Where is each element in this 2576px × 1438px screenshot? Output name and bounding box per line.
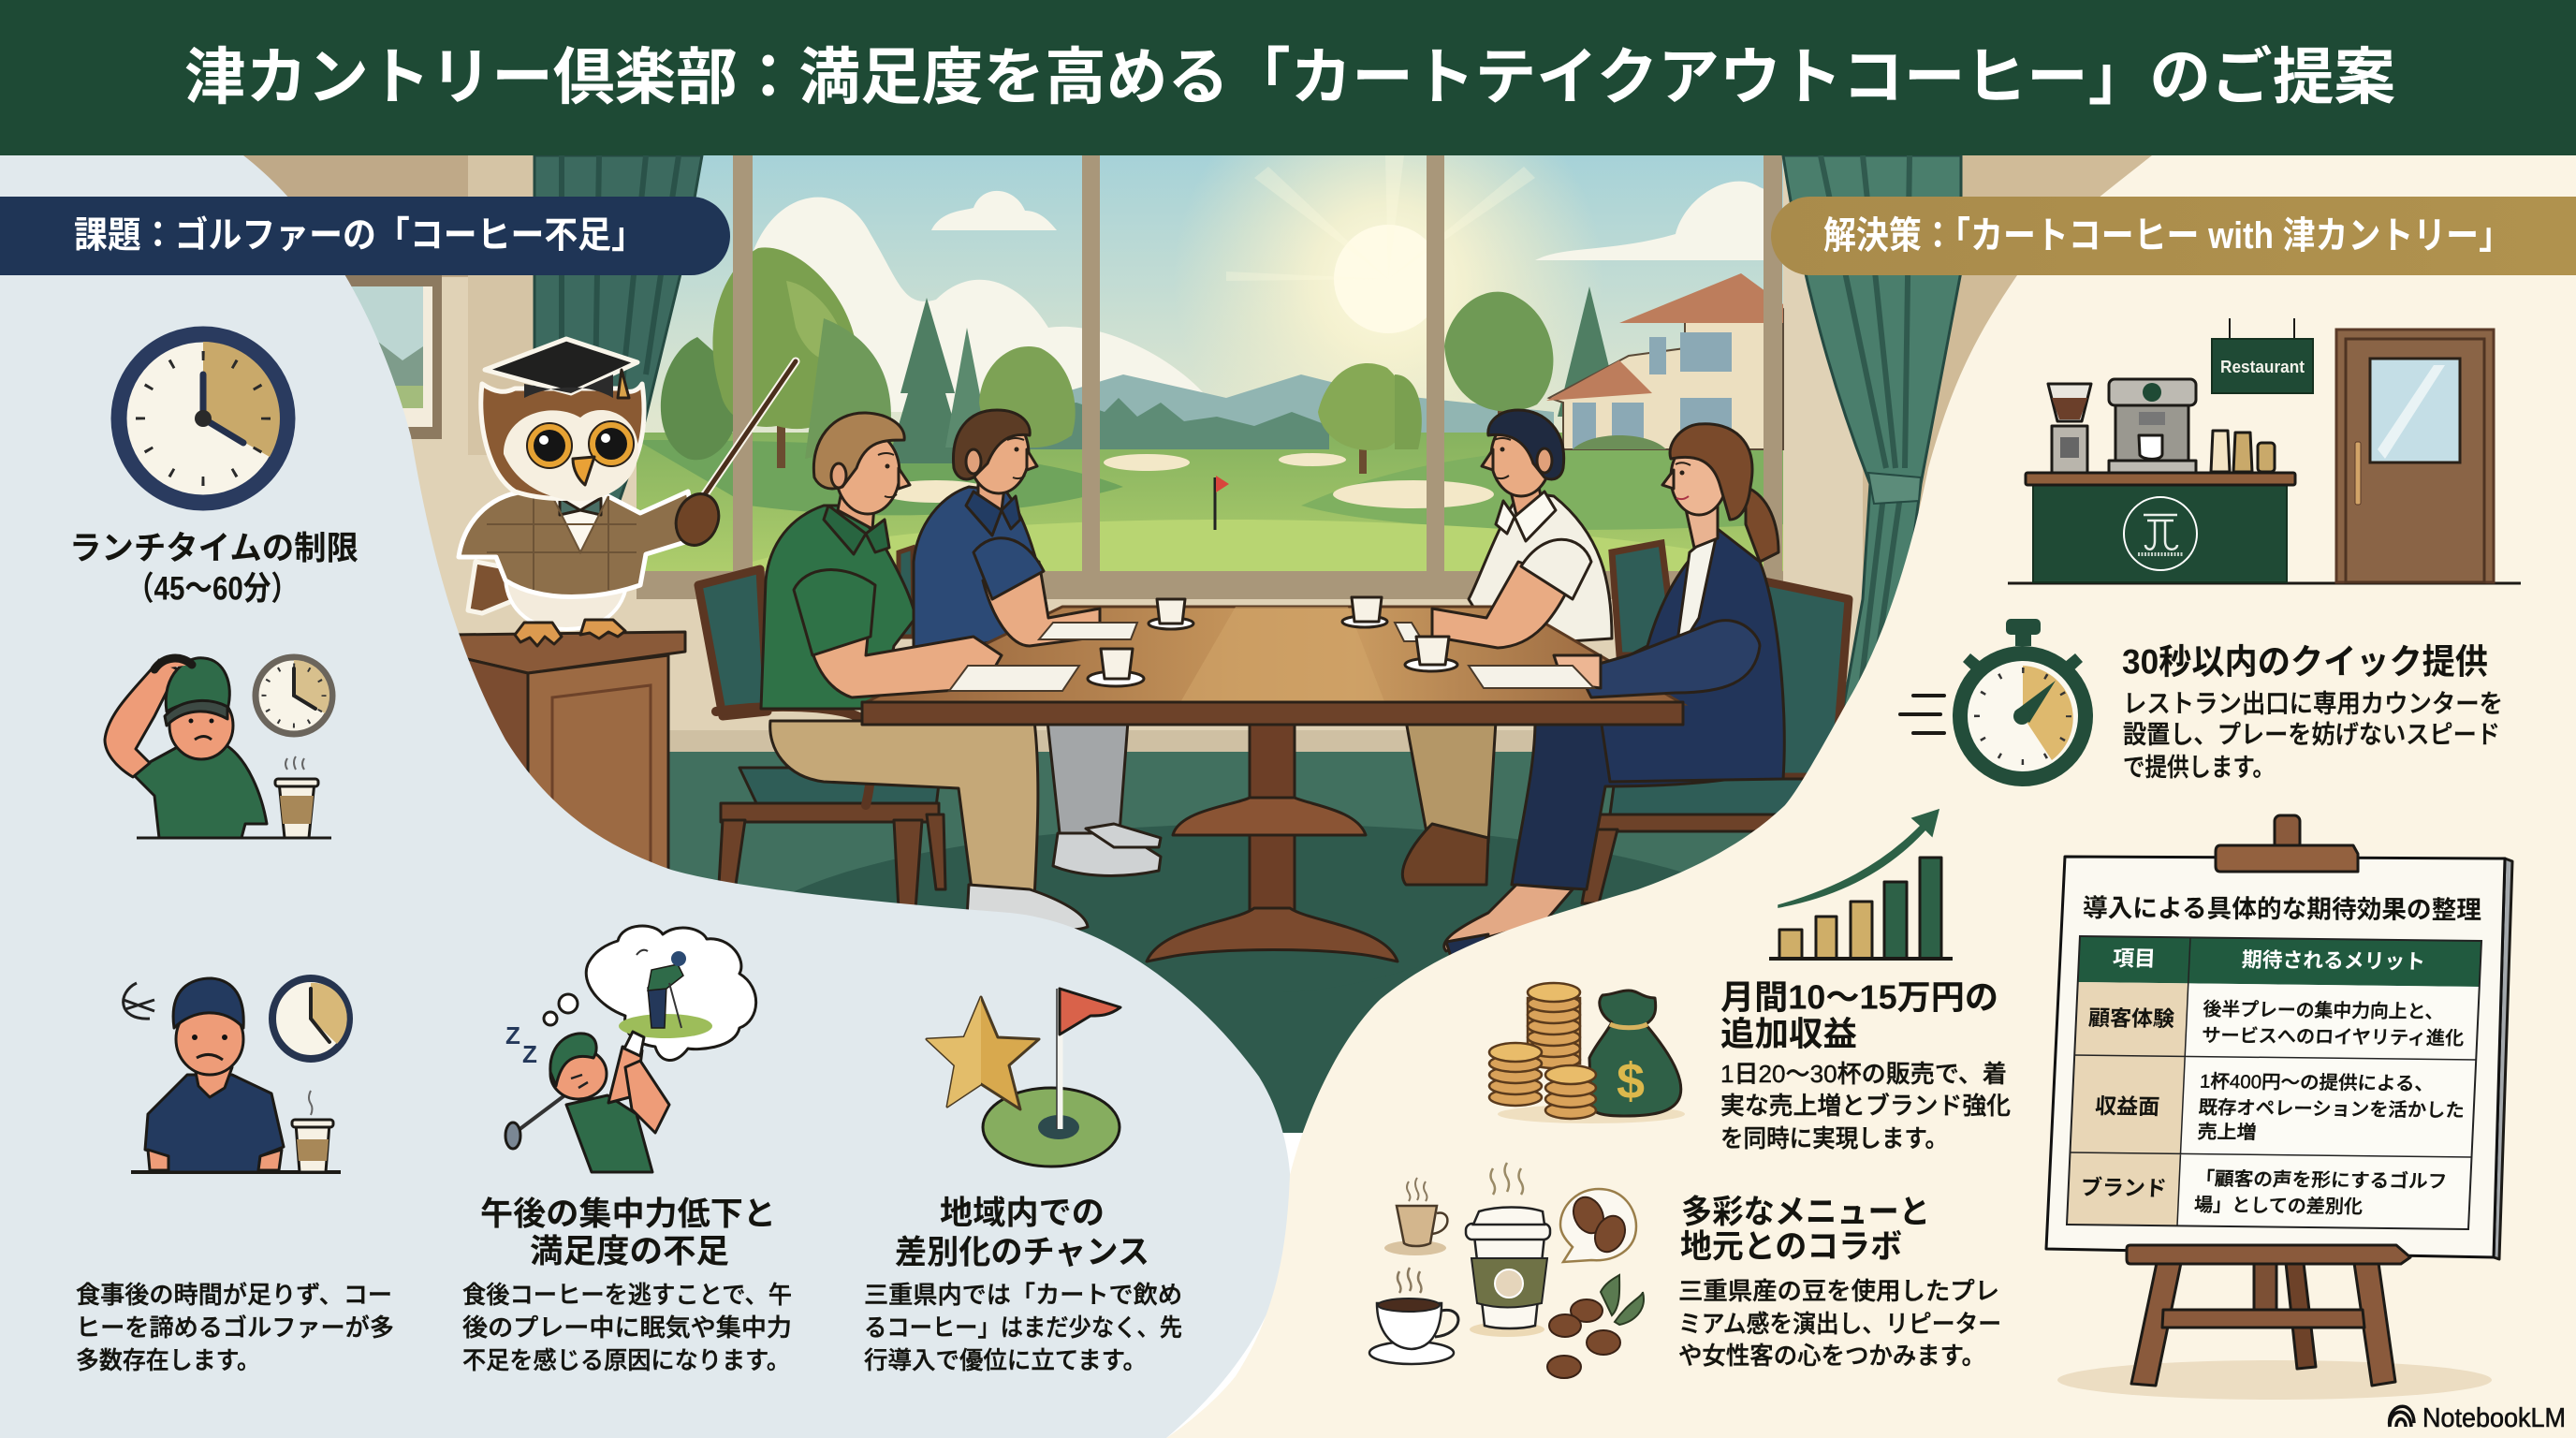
latte cup	[1384, 1178, 1447, 1255]
window view	[637, 64, 1783, 599]
text: additional revenue: を同時に実現します。	[1720, 1124, 1948, 1152]
arms and hands	[794, 538, 1760, 697]
flag on green	[1215, 476, 1229, 530]
text: additional revenue: 実な売上増とブランド強化	[1720, 1092, 2011, 1120]
effects table: 既存オペレーションを活かした	[2198, 1097, 2465, 1122]
banner: solution heading	[1771, 197, 2576, 275]
person: woman in navy suit	[1594, 424, 1784, 782]
restaurant sign: Restaurant	[2220, 358, 2305, 376]
effects table: ブランド	[2080, 1175, 2167, 1200]
panel: issue (blue background)	[0, 155, 1291, 1438]
icon: takeaway coffee 1	[275, 756, 318, 838]
effects table: 項目	[2112, 946, 2157, 971]
face	[504, 410, 638, 501]
table pedestal	[1147, 721, 1398, 961]
text column: afternoon focus: 不足を感じる原因になります。	[462, 1346, 790, 1374]
heading: lunch time limit	[69, 530, 359, 607]
text: quick service	[2122, 642, 2503, 782]
podium	[451, 632, 685, 899]
coin stack front	[1545, 1065, 1596, 1119]
golfer head	[550, 1049, 607, 1099]
coin stack tall	[1528, 983, 1580, 1068]
central scene: clubhouse meeting room	[0, 64, 2576, 1133]
text column: lunch time body: 多数存在します。	[76, 1346, 260, 1374]
chair: left front	[698, 569, 945, 910]
golfer arms	[608, 1047, 642, 1103]
effects table: 「顧客の声を形にするゴルフ	[2195, 1167, 2448, 1193]
loose beans and leaves	[1547, 1275, 1644, 1378]
coffee grinder	[2048, 384, 2091, 473]
right curtain	[1783, 155, 1961, 740]
heading: lunch time limit: ランチタイムの制限	[69, 530, 359, 567]
icon: stopwatch	[1900, 619, 2086, 779]
door	[2336, 330, 2494, 582]
text column: lunch time body: ヒーを諦めるゴルファーが多	[76, 1313, 394, 1342]
club	[515, 1091, 571, 1133]
person torsos and heads	[761, 410, 1784, 782]
text: additional revenue: 月間10〜15万円の	[1720, 977, 1998, 1017]
panel: solution (cream background)	[1166, 155, 2576, 1438]
banner: issue heading	[0, 197, 730, 275]
text: menu and local collaboration: 地元とのコラボ	[1680, 1228, 1902, 1266]
banner: issue heading: 課題：ゴルファーの「コーヒー不足」	[74, 215, 645, 257]
effects table: サービスへのロイヤリティ進化	[2202, 1025, 2465, 1049]
takeaway cup	[1466, 1163, 1550, 1337]
text: menu and local collaboration: や女性客の心をつかみます。	[1678, 1342, 1985, 1370]
icon: small clock 1	[256, 657, 332, 734]
black coffee cup	[1369, 1268, 1458, 1364]
board title: 導入による具体的な期待効果の整理	[2083, 894, 2481, 924]
icon: big wall clock	[119, 334, 287, 503]
person: green polo legs	[770, 721, 1088, 931]
clubhouse building	[1546, 273, 1783, 449]
easel top post	[2275, 815, 2300, 849]
icon: takeaway coffee 2	[292, 1091, 333, 1172]
head	[481, 384, 644, 498]
baseboard and floor	[0, 730, 2576, 1133]
pointer stick	[691, 361, 796, 515]
icon: star and golf flag	[927, 989, 1120, 1167]
text: quick service: で提供します。	[2123, 754, 2275, 782]
graduation cap	[485, 339, 637, 393]
icon: small clock 2	[272, 978, 349, 1059]
text column: lunch time body: 食事後の時間が足りず、コー	[76, 1281, 392, 1309]
window frames	[637, 155, 1783, 599]
effects table: 場」としての差別化	[2193, 1195, 2364, 1218]
text: menu and local collaboration: 多彩なメニューと	[1681, 1195, 1930, 1230]
text: quick service: 設置し、プレーを妨げないスピード	[2123, 721, 2500, 749]
belly	[505, 576, 627, 629]
heading: lunch time limit: （45〜60分）	[126, 571, 299, 607]
NotebookLM logo: NotebookLM	[2422, 1403, 2566, 1433]
title: 津カントリー倶楽部：満足度を高める「カートテイクアウトコーヒー」のご提案	[184, 42, 2395, 111]
meeting table top	[862, 607, 1683, 725]
header band	[0, 0, 2576, 155]
coin stack left	[1489, 1043, 1542, 1106]
wall	[0, 155, 2576, 764]
text: additional revenue	[1720, 977, 2011, 1152]
text: additional revenue: 1日20〜30杯の販売で、着	[1720, 1060, 2007, 1088]
text column: afternoon focus: 午後の集中力低下と	[480, 1196, 776, 1232]
effects table: 顧客体験	[2087, 1005, 2175, 1031]
text: quick service: 30秒以内のクイック提供	[2122, 642, 2488, 682]
easel legs	[2131, 1263, 2395, 1386]
effects table: 1杯400円〜の提供による、	[2199, 1071, 2435, 1094]
trees left	[661, 247, 1076, 468]
thought cloud	[586, 926, 756, 1061]
text column: afternoon focus: 食後コーヒーを逃すことで、午	[462, 1281, 792, 1309]
text column: afternoon focus: 後のプレー中に眠気や集中力	[462, 1313, 792, 1342]
bean speech bubble	[1560, 1189, 1636, 1262]
text: additional revenue: 追加収益	[1720, 1015, 1857, 1052]
icon: golfer scratching head	[105, 658, 331, 838]
person: white polo legs	[1402, 721, 1496, 885]
restaurant sign	[2212, 318, 2313, 393]
text: menu and local collaboration: ミアム感を演出し、リピーター	[1678, 1310, 2001, 1338]
text column: lunch time body	[76, 1281, 394, 1374]
board	[2046, 857, 2512, 1259]
arrow: growth	[1778, 810, 1939, 907]
back chairs	[899, 543, 1676, 655]
tweed jacket	[459, 492, 697, 597]
left curtain	[534, 155, 702, 506]
icon: golfer with navy cap	[124, 978, 341, 1172]
text column: afternoon focus: 満足度の不足	[530, 1234, 729, 1269]
papers on table	[949, 623, 1594, 691]
feet	[515, 620, 625, 646]
icon: sleepy golfer with thought cloud: Z	[522, 1040, 537, 1068]
text: menu and local collaboration: 三重県産の豆を使用したプレ	[1678, 1277, 1999, 1305]
easel shadow	[2057, 1360, 2492, 1400]
trees right	[1318, 286, 1621, 474]
effects table: 後半プレーの集中力向上と、	[2203, 999, 2444, 1023]
icon: sleepy golfer with thought cloud: Z	[505, 1021, 520, 1049]
golfer body	[566, 1095, 652, 1172]
easel with expected effects board	[2046, 815, 2512, 1400]
person: woman legs	[1444, 721, 1783, 957]
effects table: 期待されるメリット	[2241, 948, 2426, 974]
text column: regional differentiation: るコーヒー」はまだ少なく、先	[864, 1313, 1182, 1342]
distant tree line	[936, 398, 1329, 449]
counter	[2026, 473, 2295, 582]
money bag: $	[1617, 1053, 1645, 1109]
top clamp	[2216, 845, 2358, 872]
money bag	[1589, 990, 1681, 1116]
icon: sleepy golfer with thought cloud	[505, 926, 756, 1172]
effects table	[2067, 936, 2481, 1229]
picture frame on wall	[337, 275, 442, 439]
text column: regional differentiation: 地域内での	[940, 1195, 1105, 1232]
text column: afternoon focus	[462, 1196, 792, 1374]
owl mascot with pointer	[459, 339, 796, 646]
icon: coins and money bag	[1489, 983, 1685, 1123]
hand	[669, 488, 725, 551]
text column: regional differentiation	[864, 1195, 1182, 1374]
chart: rising revenue bars	[1769, 810, 1953, 959]
effects table: 売上増	[2197, 1122, 2257, 1143]
ledge	[2127, 1245, 2410, 1264]
text column: regional differentiation: 行導入で優位に立てます。	[864, 1346, 1147, 1374]
espresso machine	[2109, 379, 2196, 473]
person: white polo	[1469, 410, 1612, 646]
effects table: 収益面	[2095, 1093, 2160, 1119]
wing feathers	[468, 562, 524, 613]
person: navy polo	[914, 410, 1050, 655]
illustration: coffee counter and restaurant door	[2008, 318, 2521, 583]
coffee cups on table	[1088, 597, 1457, 686]
text column: regional differentiation: 三重県内では「カートで飲め	[864, 1281, 1182, 1309]
chair: right front	[1582, 580, 1849, 903]
text: menu and local collaboration	[1678, 1195, 2001, 1370]
text column: regional differentiation: 差別化のチャンス	[895, 1234, 1149, 1271]
stacked cups	[2211, 431, 2275, 472]
person: green polo	[761, 413, 915, 709]
person: navy polo legs	[1047, 721, 1161, 875]
text: quick service: レストラン出口に専用カウンターを	[2123, 690, 2503, 718]
icon: coffee menu group	[1369, 1163, 1644, 1378]
